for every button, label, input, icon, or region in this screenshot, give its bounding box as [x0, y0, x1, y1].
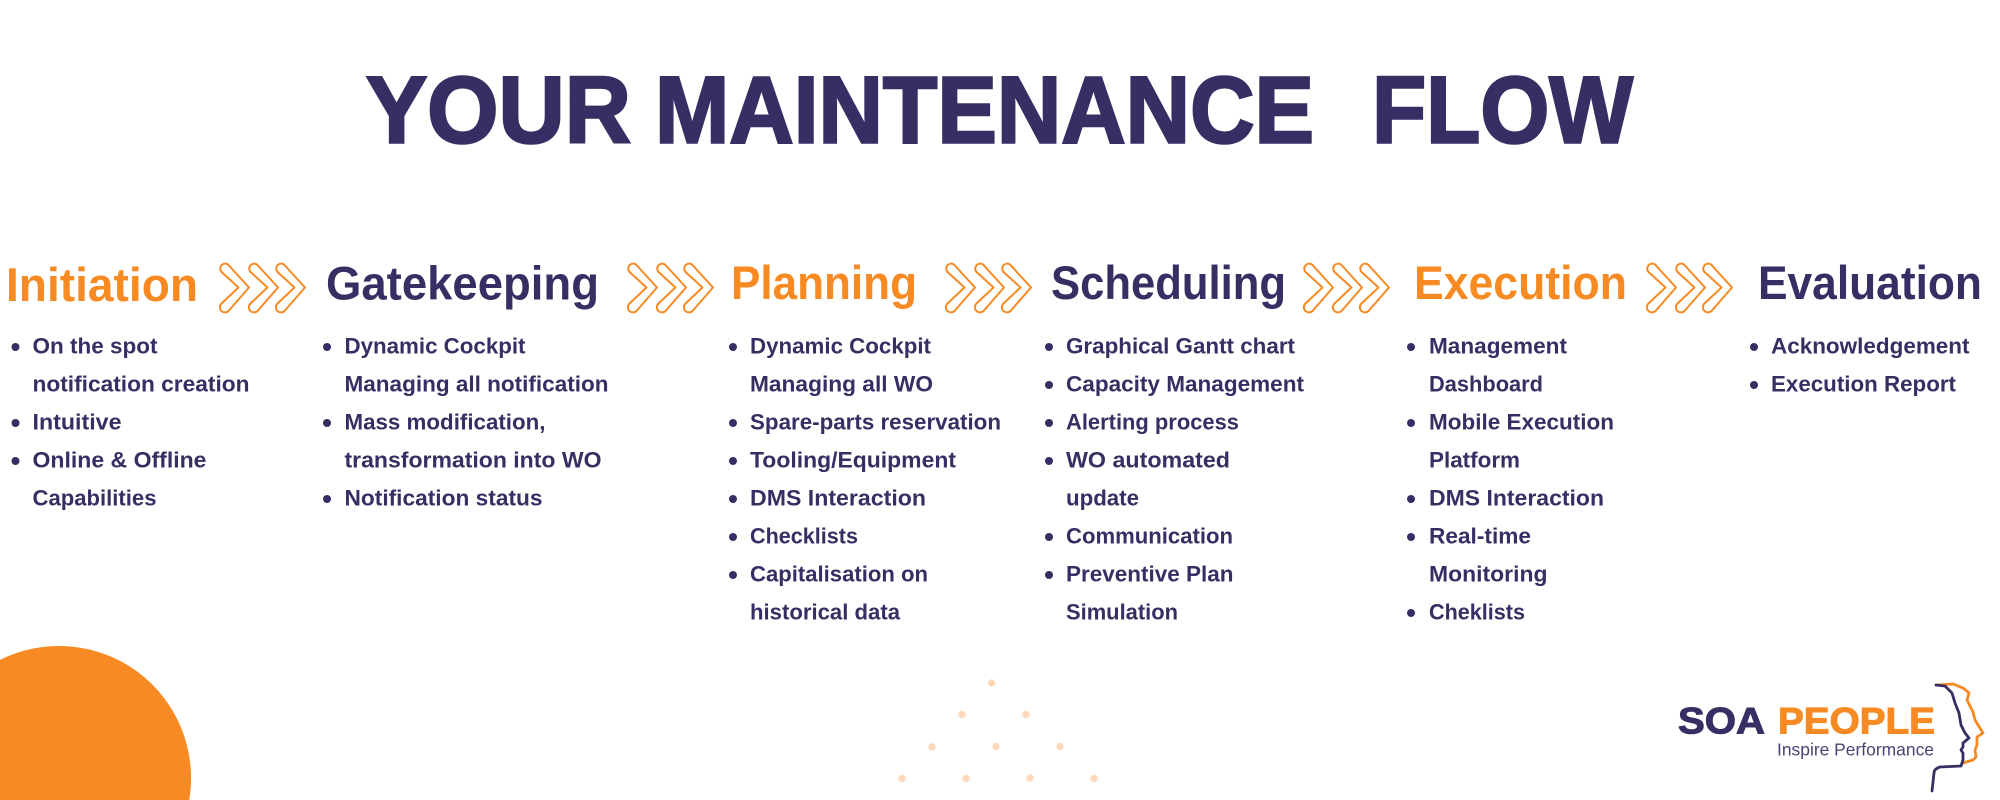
- list: gatekeeping: Managing all notification: [344, 372, 608, 396]
- list: execution: Real-time: [1429, 524, 1531, 548]
- arrow: gatekeeping to planning: [628, 264, 713, 312]
- list: planning: Dynamic Cockpit: [750, 334, 931, 358]
- heading: planning: Planning: [731, 256, 917, 309]
- arrow: planning to scheduling: [946, 264, 1031, 312]
- list: scheduling: Communication: [1066, 524, 1233, 548]
- logo wordmark: SOA: [1678, 700, 1765, 742]
- list: evaluation: Acknowledgement: [1771, 334, 1970, 358]
- title: [366, 58, 1633, 164]
- list: planning: Spare-parts reservation: [750, 410, 1001, 434]
- panel: initiation: [6, 258, 249, 510]
- panel: gatekeeping: [323, 256, 608, 510]
- list: execution: Platform: [1429, 448, 1520, 472]
- arrow: scheduling to execution: [1304, 264, 1389, 312]
- list: planning: Capitalisation on: [750, 562, 928, 586]
- title: YOUR: [366, 58, 631, 164]
- panel: evaluation: [1750, 256, 1982, 396]
- list: scheduling: update: [1066, 486, 1139, 510]
- panel: planning: [729, 256, 1001, 624]
- list: scheduling: Simulation: [1066, 600, 1178, 624]
- list: execution: Mobile Execution: [1429, 410, 1614, 434]
- list: gatekeeping: Notification status: [344, 486, 542, 510]
- list: execution: Management: [1429, 334, 1568, 358]
- list: planning: Managing all WO: [750, 372, 933, 396]
- list: planning: historical data: [750, 600, 900, 624]
- title: MAINTENANCE: [655, 58, 1314, 164]
- list: planning: DMS Interaction: [750, 486, 926, 510]
- list: initiation: [12, 334, 249, 510]
- list: initiation: Capabilities: [32, 486, 156, 510]
- list: planning: [729, 334, 1001, 624]
- logo icon: two face profiles: [1932, 684, 1983, 791]
- list: scheduling: Capacity Management: [1066, 372, 1304, 396]
- list: gatekeeping: [323, 334, 608, 510]
- heading: scheduling: Scheduling: [1051, 256, 1286, 309]
- heading: initiation: Initiation: [6, 258, 198, 311]
- logo wordmark: [1678, 700, 1935, 742]
- title: FLOW: [1372, 58, 1633, 164]
- decorative orange circle: [0, 646, 191, 800]
- list: evaluation: [1750, 334, 1970, 396]
- list: execution: DMS Interaction: [1429, 486, 1604, 510]
- list: scheduling: Alerting process: [1066, 410, 1239, 434]
- list: scheduling: Graphical Gantt chart: [1066, 334, 1295, 358]
- heading: execution: Execution: [1414, 256, 1627, 309]
- list: initiation: On the spot: [32, 334, 158, 358]
- list: scheduling: Preventive Plan: [1066, 562, 1234, 586]
- logo wordmark: PEOPLE: [1778, 700, 1935, 742]
- dot triangle: [898, 679, 1098, 782]
- list: scheduling: WO automated: [1066, 448, 1230, 472]
- list: execution: Dashboard: [1429, 372, 1543, 396]
- panel: scheduling: [1045, 256, 1304, 624]
- arrow: execution to evaluation: [1647, 264, 1732, 312]
- list: execution: Monitoring: [1429, 562, 1548, 586]
- list: execution: Cheklists: [1429, 600, 1525, 624]
- heading: gatekeeping: Gatekeeping: [326, 256, 599, 310]
- list: execution: [1407, 334, 1614, 624]
- logo tagline: Inspire Performance: [1777, 740, 1934, 760]
- arrow: initiation to gatekeeping: [220, 264, 305, 312]
- list: planning: Checklists: [750, 524, 858, 548]
- logo: SOA People: [1678, 684, 1983, 791]
- list: initiation: Intuitive: [32, 410, 122, 434]
- list: scheduling: [1045, 334, 1304, 624]
- list: gatekeeping: Dynamic Cockpit: [344, 334, 526, 358]
- list: planning: Tooling/Equipment: [750, 448, 957, 472]
- list: initiation: Online & Offline: [32, 448, 206, 472]
- list: gatekeeping: transformation into WO: [344, 448, 602, 472]
- list: initiation: notification creation: [32, 372, 249, 396]
- list: gatekeeping: Mass modification,: [344, 410, 546, 434]
- list: evaluation: Execution Report: [1771, 372, 1956, 396]
- panel: execution: [1407, 256, 1627, 624]
- heading: evaluation: Evaluation: [1758, 256, 1982, 309]
